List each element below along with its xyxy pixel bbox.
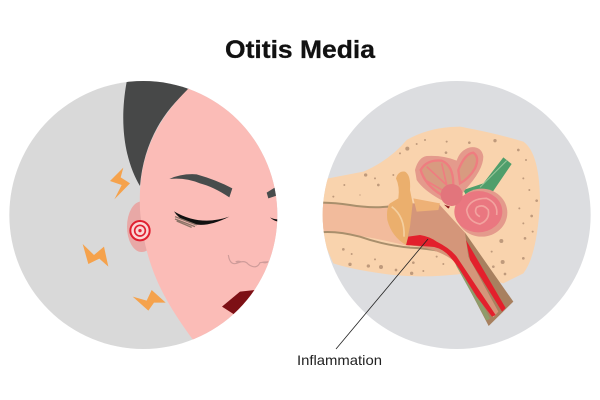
right eye: [270, 218, 278, 222]
auditory nerve: [463, 157, 512, 197]
panel: ear anatomy: [320, 81, 591, 349]
semicircular canals: [415, 147, 483, 205]
cochlea: [454, 189, 507, 237]
inflammation label: Inflammation: [297, 352, 382, 368]
pain target on ear: [130, 221, 150, 240]
eardrum and malleus: [387, 172, 413, 245]
face skin: [140, 88, 278, 340]
title: Otitis Media: [225, 36, 376, 64]
bone speckles: [332, 139, 538, 275]
second red stripe: [466, 240, 506, 312]
right circle background: [323, 81, 591, 349]
middle ear cavity: [406, 203, 498, 317]
tube mucosa stripe: [455, 263, 490, 320]
lightning bolt middle: [83, 244, 108, 267]
lightning bolt bottom: [133, 290, 166, 311]
lightning bolt top: [110, 168, 130, 199]
right eyebrow: [266, 188, 276, 198]
ear canal: [320, 203, 410, 247]
temporal bone: [320, 127, 540, 283]
panel: face with ear pain: [9, 81, 278, 349]
left eyebrow: [169, 174, 232, 197]
lips: [222, 290, 255, 315]
left circle background: [9, 81, 277, 349]
stapes/incus ossicle: [413, 198, 440, 212]
inflammation red area: [406, 235, 496, 317]
canal outlines: [320, 203, 443, 252]
vestibule: [441, 184, 463, 206]
small dark mark: [444, 205, 450, 209]
nose: [228, 255, 268, 267]
ear: [127, 202, 147, 252]
closed eye: [174, 211, 229, 227]
leader line: [336, 239, 428, 349]
face and hair: [123, 81, 278, 340]
eustachian tube: [465, 232, 514, 326]
hair: [123, 77, 190, 186]
